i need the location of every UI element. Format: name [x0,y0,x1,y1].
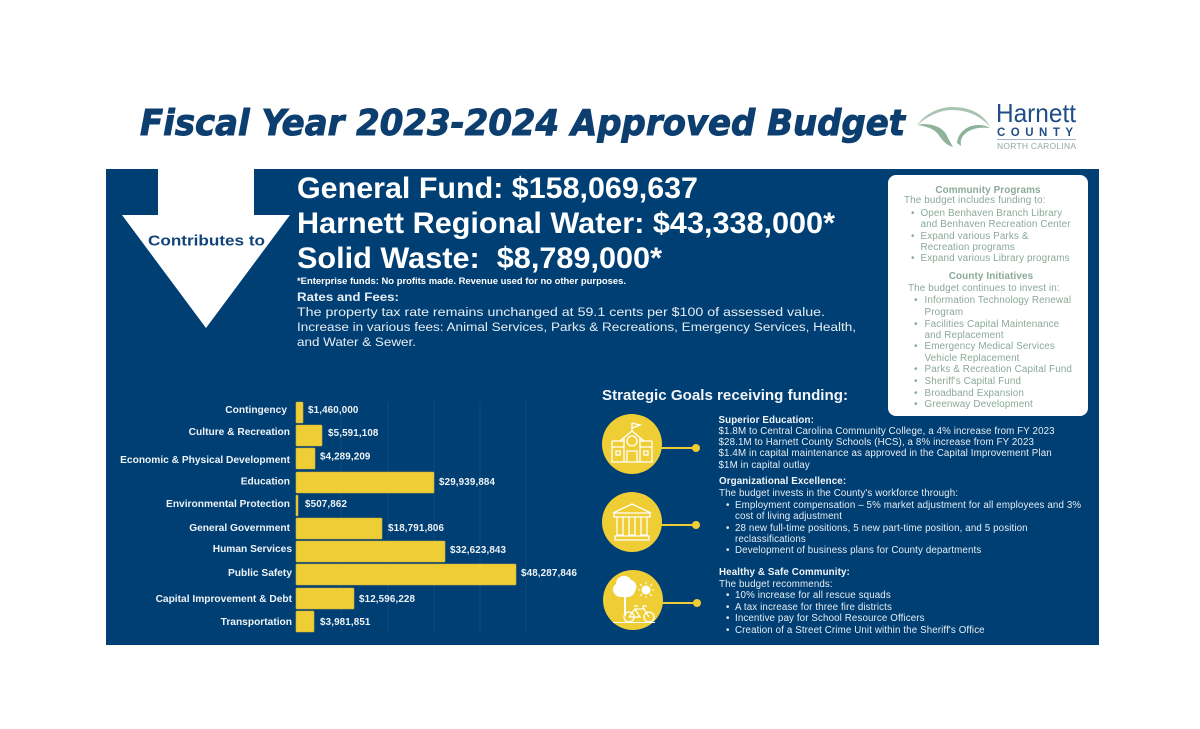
bar chart: expenditures by function: Public Safety [228,568,292,579]
text: organizational excellence: • [726,500,730,511]
county initiatives: Sheriff's Capital Fund [924,376,1021,387]
bar chart: expenditures by function: Education [241,476,290,488]
text: healthy and safe community [719,567,985,636]
text: organizational excellence: 28 new full-time positions, 5 new part-time position, and 5 position [735,523,1028,534]
text: organizational excellence [719,476,1081,556]
bar chart: expenditures by function: $3,981,851 [320,617,371,628]
bar chart: expenditures by function: Transportation [221,617,292,628]
bar chart: expenditures by function: $1,460,000 [308,405,359,416]
text: healthy and safe community: Healthy & Safe Community: [719,567,850,578]
community programs: Community Programs [935,185,1041,196]
bar chart: expenditures by function: Culture & Recreation [189,427,290,438]
fund totals: General Fund: $158,069,637 [297,172,698,205]
county initiatives: The budget continues to invest in: [908,283,1060,294]
text: healthy and safe community: • [726,590,730,601]
county initiatives: • [914,295,918,306]
county initiatives: Facilities Capital Maintenance [924,319,1060,330]
county initiatives: Parks & Recreation Capital Fund [924,364,1072,375]
county initiatives: • [914,319,918,330]
arrow: contributes to [122,169,290,328]
rates and fees: Increase in various fees: Animal Services, Parks & Recreations, Emergency Services, Health, [297,320,856,334]
county initiatives: Greenway Development [924,399,1033,410]
bar chart: expenditures by function: Capital Improvement & Debt [156,594,293,605]
text: superior education: $28.1M to Harnett County Schools (HCS), a 8% increase from FY 2023 [718,437,1034,448]
bar chart: expenditures by function: $507,862 [305,499,347,510]
text: healthy and safe community: 10% increase for all rescue squads [735,590,891,601]
text: organizational excellence: Employment compensation – 5% market adjustment for all employees and 3% [735,500,1081,511]
icon: school [602,414,700,474]
bar chart: expenditures by function: Contingency [225,405,287,416]
rates and fees: and Water & Sewer. [297,335,416,349]
county initiatives: • [914,341,918,352]
text: superior education: Superior Education: [718,415,814,426]
text: organizational excellence: The budget invests in the County's workforce through: [719,488,958,499]
bar chart: expenditures by function: General Government [189,523,291,534]
county initiatives: County Initiatives [949,271,1034,282]
bar chart: expenditures by function: Environmental Protection [166,499,290,510]
text: healthy and safe community: • [726,613,730,624]
county initiatives: and Replacement [924,330,1004,341]
bar chart: expenditures by function: $4,289,209 [320,452,371,462]
rates and fees: The property tax rate remains unchanged at 59.1 cents per $100 of assessed value. [297,305,825,319]
text: healthy and safe community: Creation of a Street Crime Unit within the Sheriff's Office [735,625,985,636]
heading: strategic goals: Strategic Goals receiving funding: [602,388,848,404]
county initiatives: • [914,399,918,410]
community programs: The budget includes funding to: [904,195,1046,206]
county initiatives: Vehicle Replacement [924,353,1020,364]
fund totals [297,172,836,275]
community programs: Open Benhaven Branch Library [920,208,1062,219]
rates and fees [297,290,856,349]
title: Fiscal Year 2023-2024 Approved Budget [140,103,907,144]
logo: Harnett County: COUNTY [997,127,1073,139]
fund totals: Harnett Regional Water: $43,338,000* [297,207,836,240]
bar chart: expenditures by function: Economic & Physical Development [120,455,291,466]
text: organizational excellence: • [726,545,730,556]
county initiatives: • [914,376,918,387]
community programs: • [911,231,915,242]
bar chart: expenditures by function: Human Services [213,544,292,555]
bar chart: expenditures by function: $12,596,228 [359,594,416,605]
county initiatives: Emergency Medical Services [924,341,1055,352]
bar chart: expenditures by function: $29,939,884 [439,477,496,488]
community programs: • [911,208,915,219]
text: organizational excellence: Organizational Excellence: [719,476,846,487]
text: superior education: $1M in capital outlay [718,460,810,471]
bar chart: expenditures by function: $48,287,846 [521,568,578,579]
text: superior education [718,415,1055,471]
text: organizational excellence: • [726,523,730,534]
community programs: Expand various Library programs [920,253,1070,264]
bar chart: expenditures by function: $32,623,843 [450,545,507,556]
logo: Harnett County: NORTH CAROLINA [997,141,1076,151]
community programs: Expand various Parks & [920,231,1029,242]
text: organizational excellence: Development of business plans for County departments [735,545,981,556]
rates and fees: Rates and Fees: [297,290,399,304]
county initiatives: Information Technology Renewal [924,295,1071,306]
bar chart: expenditures by function [120,402,578,633]
community programs: and Benhaven Recreation Center [920,219,1071,230]
icon: tree, sun and bicycle [603,570,701,630]
enterprise funds note: *Enterprise funds: No profits made. Revenue used for no other purposes. [297,276,626,286]
text: superior education: $1.8M to Central Carolina Community College, a 4% increase from FY 2023 [718,426,1055,437]
county initiatives: • [914,364,918,375]
text: healthy and safe community: • [726,625,730,636]
bar chart: expenditures by function: $18,791,806 [388,523,445,534]
text: healthy and safe community: Incentive pay for School Resource Officers [735,613,925,624]
panel: community programs and county initiatives [888,175,1088,416]
text: healthy and safe community: A tax increase for three fire districts [735,602,892,613]
logo: Harnett County: Harnett [996,98,1077,128]
main navy panel [106,169,1099,645]
text: superior education: $1.4M in capital maintenance as approved in the Capital Improvement Plan [718,448,1052,459]
text: healthy and safe community: The budget recommends: [719,579,833,590]
community programs: • [911,253,915,264]
text: organizational excellence: reclassifications [735,534,806,545]
text: healthy and safe community: • [726,602,730,613]
county initiatives [908,271,1072,410]
text: organizational excellence: cost of living adjustment [735,511,842,522]
county initiatives: Broadband Expansion [924,388,1024,399]
logo: Harnett County [917,98,1077,151]
county initiatives: Program [924,307,963,318]
icon: government building [602,492,700,552]
county initiatives: • [914,388,918,399]
arrow: contributes to: Contributes to [148,234,265,250]
community programs [904,185,1071,264]
bar chart: expenditures by function: $5,591,108 [328,428,379,439]
fund totals: Solid Waste: $8,789,000* [297,242,663,275]
community programs: Recreation programs [920,242,1015,253]
